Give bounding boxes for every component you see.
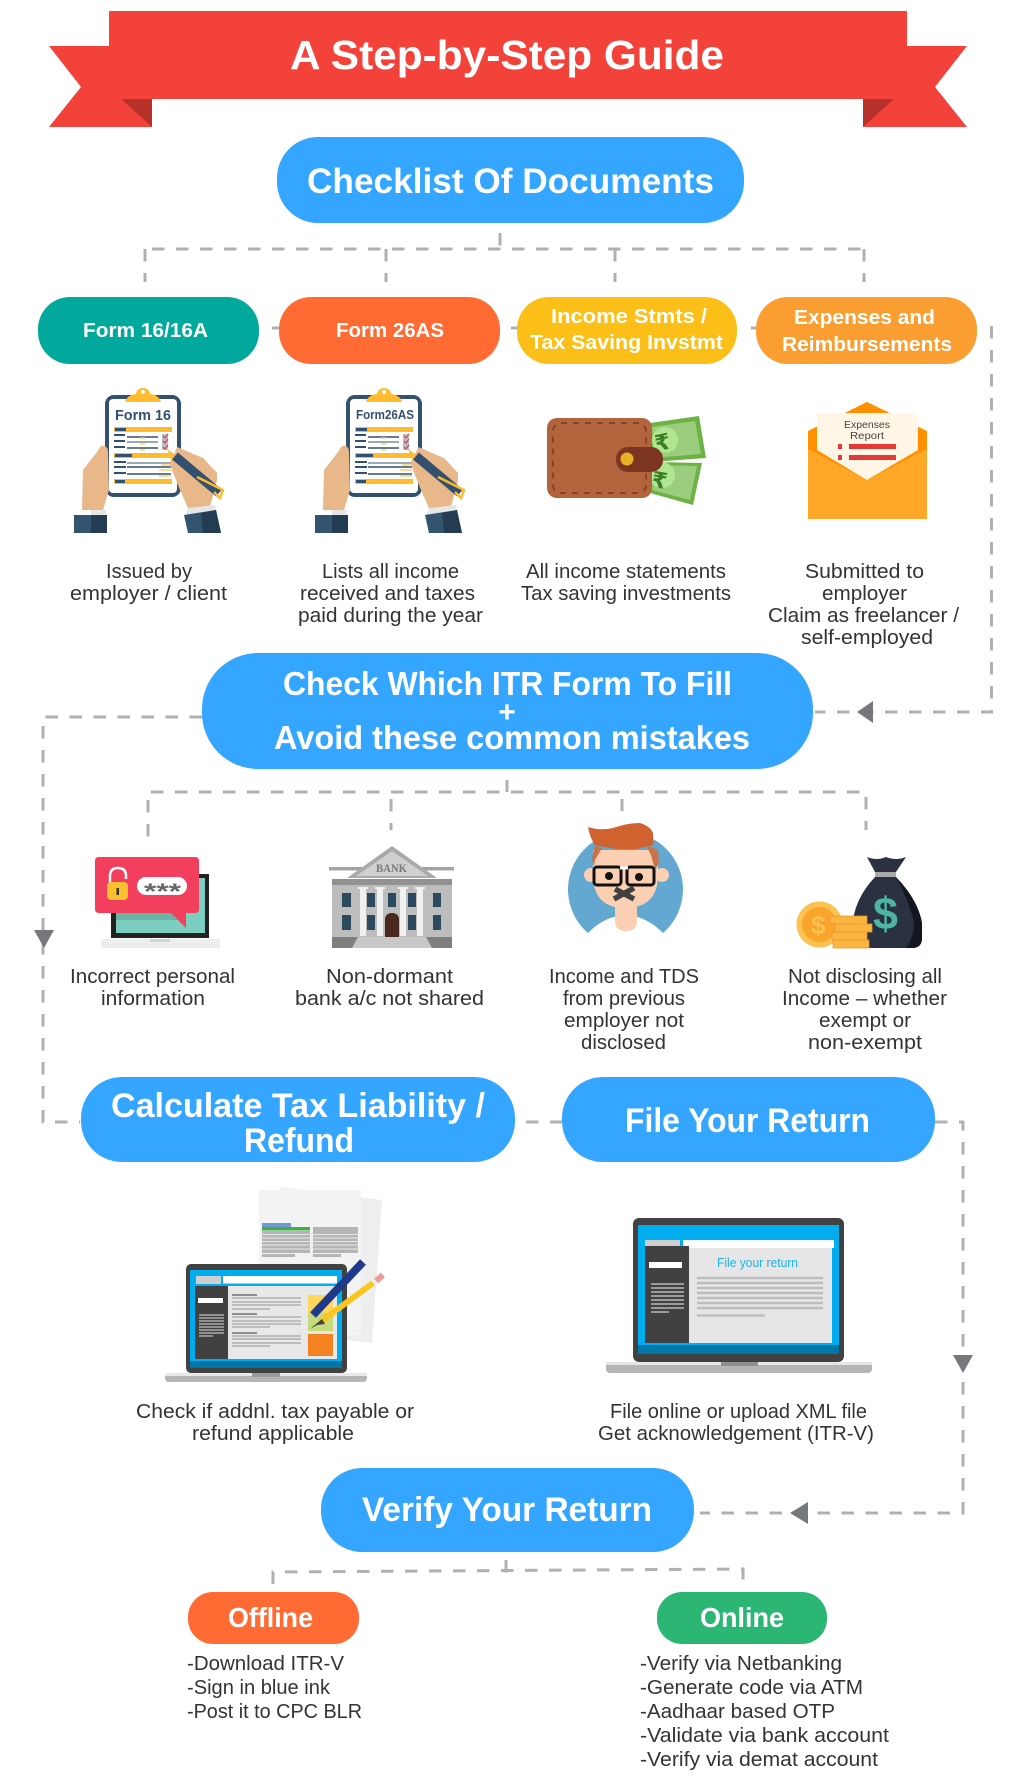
icon: money bag with coins: [796, 857, 922, 948]
text: lists all income: paid during the year: [298, 605, 483, 627]
text: incorrect personal information: [70, 966, 235, 1010]
text: not disclosing all income: exempt or: [819, 1010, 911, 1032]
text: file online: Get acknowledgement (ITR-V): [598, 1423, 874, 1445]
banner left tail: [49, 46, 152, 127]
text: incorrect personal information: information: [101, 988, 205, 1010]
text: non-dormant bank account: [295, 966, 484, 1010]
pill: expenses: Reimbursements: [782, 334, 952, 356]
text: all income statements: Tax saving investments: [521, 583, 731, 605]
connector: mistakes branches: [148, 780, 866, 838]
pill: online: Online: [700, 1602, 784, 1633]
text: check if tax payable: [136, 1401, 414, 1445]
text: income and TDS: from previous: [563, 988, 685, 1010]
connector: calculate to file: [526, 1120, 562, 1124]
arrow: pointing down: [953, 1355, 973, 1373]
text: check if tax payable: Check if addnl. tax payable or: [136, 1401, 414, 1423]
text: not disclosing all income: non-exempt: [808, 1032, 922, 1054]
text: lists all income: [298, 561, 483, 627]
pill: income statements: [517, 297, 737, 364]
text: non-dormant bank account: bank a/c not shared: [295, 988, 484, 1010]
connector: expenses to ITR form: [815, 326, 992, 723]
list: online steps: -Verify via demat account: [640, 1749, 878, 1771]
icon: bank building: BANK: [376, 861, 408, 875]
text: lists all income: Lists all income: [322, 561, 459, 583]
step heading: checklist of documents: [277, 137, 744, 223]
text: all income statements: [521, 561, 731, 605]
text: not disclosing all income: [782, 966, 947, 1054]
icon: form 16 clipboard with hands: Form 16: [115, 407, 171, 424]
list: online steps: -Aadhaar based OTP: [640, 1701, 835, 1723]
list: offline steps: [187, 1653, 362, 1723]
icon: wallet with rupee notes: ₹: [653, 430, 673, 457]
step heading: check which ITR form: Avoid these common mistakes: [274, 719, 750, 756]
icon: envelope with expenses report: Expenses: [844, 419, 890, 431]
connector: file to verify: [700, 1122, 973, 1524]
text: submitted to employer: Submitted to: [805, 561, 924, 583]
icon: laptop with tax papers and pencils: [165, 1187, 383, 1382]
pill: Form 26AS: [279, 297, 500, 364]
banner right tail: [863, 46, 967, 127]
arrow: pointing down: [34, 930, 54, 948]
connector: checklist to forms: [145, 233, 864, 282]
step heading: check which ITR form: [202, 653, 813, 769]
icon: form 26AS clipboard with hands: [315, 388, 464, 533]
step heading: check which ITR form: +: [498, 696, 516, 729]
pill: offline: [188, 1592, 359, 1644]
icon: wallet with rupee notes: ₹: [650, 468, 669, 495]
list: online steps: -Validate via bank account: [640, 1725, 889, 1747]
connector: ITR form to calculate tax: [34, 717, 202, 1122]
text: income and TDS: disclosed: [581, 1032, 666, 1054]
arrow: pointing left: [790, 1502, 808, 1524]
pill: offline: Offline: [228, 1602, 313, 1633]
text: issued by employer: Issued by: [106, 561, 192, 583]
pill: Form 16/16A: [38, 297, 259, 364]
icon: form 26AS clipboard with hands: Form26AS: [356, 407, 414, 422]
icon: envelope with expenses report: [808, 402, 927, 519]
step heading: file your return: [562, 1077, 935, 1162]
title: A Step-by-Step Guide: [290, 32, 724, 78]
step heading: check which ITR form: Check Which ITR Form To Fill: [283, 665, 732, 702]
step heading: calculate tax liability: Refund: [244, 1122, 354, 1160]
text: submitted to employer: [768, 561, 959, 649]
icon: bank building: [329, 846, 454, 948]
list: offline steps: -Post it to CPC BLR: [187, 1701, 362, 1723]
step heading: verify your return: Verify Your Return: [362, 1491, 652, 1529]
arrow: pointing left to ITR form: [857, 701, 873, 723]
pill: Form 26AS: Form 26AS: [336, 320, 444, 342]
text: all income statements: All income statements: [526, 561, 726, 583]
icon: form 16 clipboard with hands: [74, 388, 223, 533]
step heading: file your return: File Your Return: [625, 1102, 870, 1140]
text: issued by employer: [70, 561, 227, 605]
text: non-dormant bank account: Non-dormant: [326, 966, 453, 988]
pill: income statements: Tax Saving Invstmt: [530, 332, 723, 354]
icon: wallet with rupee notes: [547, 416, 706, 505]
text: not disclosing all income: Not disclosing all: [788, 966, 942, 988]
step heading: calculate tax liability: Calculate Tax Liability /: [111, 1087, 486, 1125]
connector: between form pills: [272, 326, 756, 330]
text: issued by employer: employer / client: [70, 583, 227, 605]
icon: laptop with password alert: ***: [144, 879, 182, 904]
pill: expenses: Expenses and: [794, 307, 935, 329]
pill: online: [657, 1592, 827, 1644]
text: submitted to employer: employer: [822, 583, 907, 605]
list: offline steps: -Sign in blue ink: [187, 1677, 331, 1699]
step heading: verify your return: [321, 1468, 694, 1552]
icon: laptop with file your return screen: File your return: [717, 1255, 798, 1270]
pill: expenses: [756, 297, 977, 364]
text: check if tax payable: refund applicable: [192, 1423, 354, 1445]
list: online steps: -Verify via Netbanking: [640, 1653, 842, 1675]
text: income and TDS: Income and TDS: [549, 966, 699, 988]
pill: income statements: Income Stmts /: [551, 306, 707, 328]
list: offline steps: -Download ITR-V: [187, 1653, 345, 1675]
text: income and TDS: employer not: [564, 1010, 684, 1032]
pill: Form 16/16A: Form 16/16A: [83, 320, 208, 342]
icon: money bag with coins: $: [811, 910, 826, 940]
list: online steps: -Generate code via ATM: [640, 1677, 863, 1699]
step heading: checklist of documents: Checklist Of Documents: [307, 162, 714, 201]
text: income and TDS: [549, 966, 699, 1054]
text: file online: [598, 1401, 874, 1445]
list: online steps: [640, 1653, 889, 1771]
text: submitted to employer: Claim as freelancer /: [768, 605, 959, 627]
icon: envelope with expenses report: Report: [850, 430, 884, 442]
text: not disclosing all income: Income – whether: [782, 988, 947, 1010]
step heading: calculate tax liability: [81, 1077, 515, 1162]
title banner: [49, 11, 967, 139]
connector: verify branches: [273, 1560, 743, 1584]
icon: laptop with password alert: [95, 857, 220, 948]
icon: laptop with file your return screen: [606, 1218, 872, 1373]
icon: money bag with coins: $: [873, 888, 898, 939]
text: lists all income: received and taxes: [300, 583, 475, 605]
icon: man with taped mouth: [568, 823, 683, 933]
text: submitted to employer: self-employed: [801, 627, 933, 649]
text: incorrect personal information: Incorrect personal: [70, 966, 235, 988]
text: file online: File online or upload XML file: [610, 1401, 867, 1423]
